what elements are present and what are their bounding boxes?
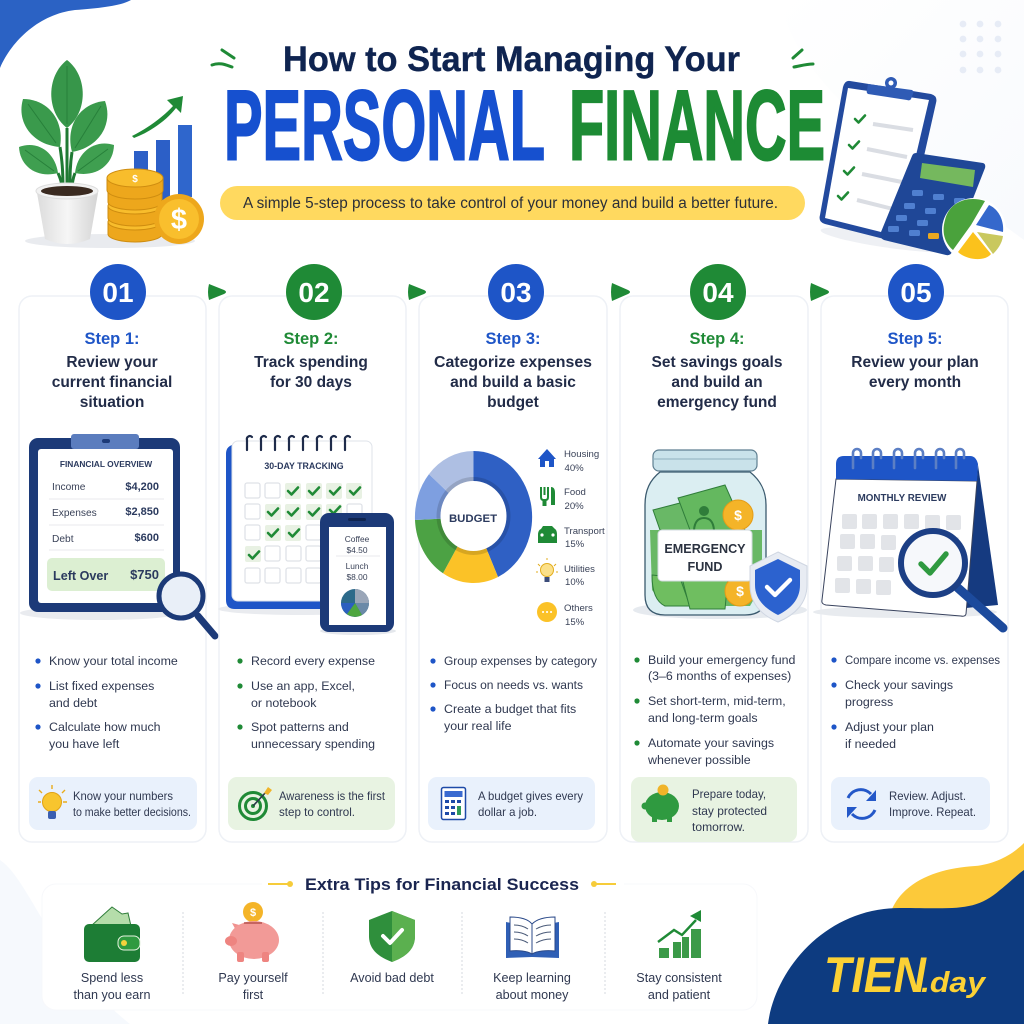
callout: Improve. Repeat. (889, 806, 976, 819)
bullet list: your real life (444, 719, 512, 733)
step connector arrows (208, 283, 829, 301)
panel: step 3: Step 3: (485, 330, 541, 348)
panel: step 1: current financial (52, 374, 172, 391)
panel: step 2: Track spending (254, 354, 368, 371)
bullet list: Group expenses by category (444, 654, 598, 668)
panel: step 3: and build a basic (450, 374, 576, 391)
callout: to make better decisions. (73, 806, 191, 819)
illustration: monthly review calendar: MONTHLY REVIEW (858, 493, 947, 504)
illustration: financial overview clipboard (20, 434, 215, 636)
callout: Awareness is the first (279, 790, 386, 803)
bullet list: Set short-term, mid-term, (648, 694, 786, 708)
legend: Others (564, 603, 593, 614)
subtitle pill: A simple 5-step process to take control of your money and build a better future. (243, 195, 778, 212)
illustration: financial overview clipboard: $2,850 (125, 506, 159, 518)
illustration: 30-day tracking calendar and phone: Lunch (346, 561, 369, 571)
panel: step 1: Review your (66, 354, 158, 371)
callout (631, 777, 797, 842)
panel: step 2: for 30 days (270, 374, 352, 391)
panel: step 4: and build an (671, 374, 763, 391)
bullet list: whenever possible (647, 753, 751, 767)
tip: stay consistent (636, 910, 722, 1002)
illustration: financial overview clipboard: Income (52, 482, 86, 493)
bullet list: Spot patterns and (251, 720, 349, 734)
bullet list: Automate your savings (648, 736, 774, 750)
illustration: 30-day tracking calendar and phone: Coffee (345, 534, 370, 544)
callout: tomorrow. (692, 821, 745, 834)
illustration: financial overview clipboard: $4,200 (125, 481, 159, 493)
tip: pay yourself first: Pay yourself (218, 971, 288, 985)
legend: Housing (564, 449, 599, 460)
illustration: plant, bars and coins: $ (171, 204, 187, 236)
chart: budget donut (415, 451, 532, 583)
legend: 10% (565, 577, 585, 588)
panel: step 2: Step 2: (283, 330, 339, 348)
tip: avoid bad debt (350, 911, 434, 985)
illustration: 30-day tracking calendar and phone: $8.00 (347, 572, 368, 582)
tip: spend less: Spend less (81, 971, 143, 985)
callout: Review. Adjust. (889, 790, 966, 803)
illustration: financial overview clipboard: $600 (135, 532, 159, 544)
panel: step 3: 03 (500, 277, 532, 308)
tip: avoid bad debt: Avoid bad debt (350, 971, 434, 985)
tip: spend less (73, 907, 151, 1002)
chart: budget donut: BUDGET (449, 513, 497, 525)
legend: 15% (565, 539, 585, 550)
tip: keep learning: about money (496, 988, 569, 1002)
tip: stay consistent: Stay consistent (636, 971, 722, 985)
panel: step 2: 02 (298, 277, 330, 308)
legend: Transport (564, 526, 605, 537)
bullet list: and debt (49, 696, 98, 710)
panel: step 5: Step 5: (887, 330, 943, 348)
legend: 15% (565, 617, 585, 628)
callout: step to control. (279, 806, 355, 819)
callout: dollar a job. (478, 806, 537, 819)
subtitle pill (220, 186, 805, 220)
tip: pay yourself first: $ (250, 907, 256, 919)
bullet list (35, 654, 178, 751)
illustration: emergency fund jar: EMERGENCY (664, 542, 746, 556)
bullet list: if needed (845, 737, 896, 751)
bullet list: Create a budget that fits (444, 702, 576, 716)
bullet list: Compare income vs. expenses (845, 653, 1000, 667)
tip: pay yourself first (218, 902, 288, 1002)
illustration: emergency fund jar (633, 450, 807, 622)
bullet list: progress (845, 695, 893, 709)
bullet list: Check your savings (845, 678, 953, 692)
panel: step 4: emergency fund (657, 394, 777, 411)
callout (228, 777, 395, 830)
bullet list: Adjust your plan (845, 720, 934, 734)
logo badge: TIEN (824, 947, 927, 1003)
dot pattern (960, 21, 1001, 73)
callout (831, 777, 990, 830)
bullet list: Calculate how much (49, 720, 161, 734)
illustration: 30-day tracking calendar and phone: 30-DAY TRACKING (264, 461, 344, 471)
panel: step 1 (19, 264, 215, 842)
callout (29, 777, 197, 830)
heading: Extra Tips for Financial Success (305, 875, 579, 894)
bullet list (831, 653, 1000, 751)
bullet list: and long-term goals (648, 711, 758, 725)
bullet list (237, 654, 375, 751)
panel: step 5: Review your plan (851, 354, 979, 371)
panel: step 1: Step 1: (84, 330, 140, 348)
bullet list: List fixed expenses (49, 679, 154, 693)
illustration: emergency fund jar: $ (736, 583, 744, 599)
callout: Know your numbers (73, 790, 173, 803)
legend: 20% (564, 501, 584, 512)
bullet list: Build your emergency fund (648, 653, 796, 667)
illustration: financial overview clipboard: Expenses (52, 508, 97, 519)
panel: step 4: Set savings goals (652, 354, 782, 371)
illustration: financial overview clipboard: Left Over (53, 569, 108, 583)
bullet list: Use an app, Excel, (251, 679, 355, 693)
illustration: clipboard, calculator, pie (820, 77, 1006, 262)
illustration: emergency fund jar: FUND (688, 560, 722, 574)
logo badge: .day (921, 967, 987, 999)
illustration: plant, bars and coins (19, 60, 204, 248)
bullet list (634, 653, 796, 767)
illustration: 30-day tracking calendar and phone: $4.50 (347, 545, 368, 555)
callout (428, 777, 595, 830)
panel: step 1: 01 (102, 277, 134, 308)
legend (536, 449, 605, 628)
title: PERSONAL (224, 70, 545, 180)
decorative blue corner shape (0, 0, 131, 68)
tip: keep learning (493, 917, 571, 1002)
tip: stay consistent: and patient (648, 988, 711, 1002)
legend: Utilities (564, 564, 595, 575)
bullet list: Know your total income (49, 654, 178, 668)
illustration: financial overview clipboard: $750 (130, 567, 159, 582)
panel: step 3 (415, 264, 607, 842)
decorative yellow wave (892, 843, 1024, 909)
tip: keep learning: Keep learning (493, 971, 571, 985)
callout: Prepare today, (692, 788, 766, 801)
legend: 40% (564, 463, 584, 474)
illustration: emergency fund jar: $ (734, 507, 742, 523)
panel: step 5: every month (869, 374, 961, 391)
panel: step 3: budget (487, 394, 539, 411)
title: How to Start Managing Your (283, 40, 740, 79)
bullet list: or notebook (251, 696, 317, 710)
illustration: monthly review calendar (813, 449, 1003, 628)
illustration: plant, bars and coins: $ (132, 174, 138, 185)
panel: step 4 (620, 264, 808, 842)
panel: step 4: Step 4: (689, 330, 745, 348)
tip: spend less: than you earn (73, 988, 151, 1002)
bullet list: (3–6 months of expenses) (648, 669, 791, 683)
panel: step 5: 05 (900, 277, 932, 308)
tip: pay yourself first: first (243, 988, 264, 1002)
panel: step 3: Categorize expenses (434, 354, 592, 371)
title: FINANCE (569, 70, 825, 180)
bullet list: unnecessary spending (251, 737, 375, 751)
legend: Food (564, 487, 586, 498)
panel: step 4: 04 (702, 277, 734, 308)
panel: step 1: situation (80, 394, 144, 411)
bullet list: Record every expense (251, 654, 375, 668)
bullet list: Focus on needs vs. wants (444, 678, 583, 692)
bullet list (430, 654, 598, 733)
callout: A budget gives every (478, 790, 583, 803)
panel: step 5 (813, 264, 1008, 842)
panel: extra tips (42, 875, 757, 1010)
illustration: financial overview clipboard: FINANCIAL OVERVIEW (60, 459, 152, 469)
callout: stay protected (692, 805, 767, 818)
panel: step 2 (218, 264, 406, 842)
logo badge (768, 870, 1024, 1024)
illustration: financial overview clipboard: Debt (52, 534, 74, 545)
illustration: 30-day tracking calendar and phone (218, 436, 396, 635)
bullet list: you have left (49, 737, 120, 751)
